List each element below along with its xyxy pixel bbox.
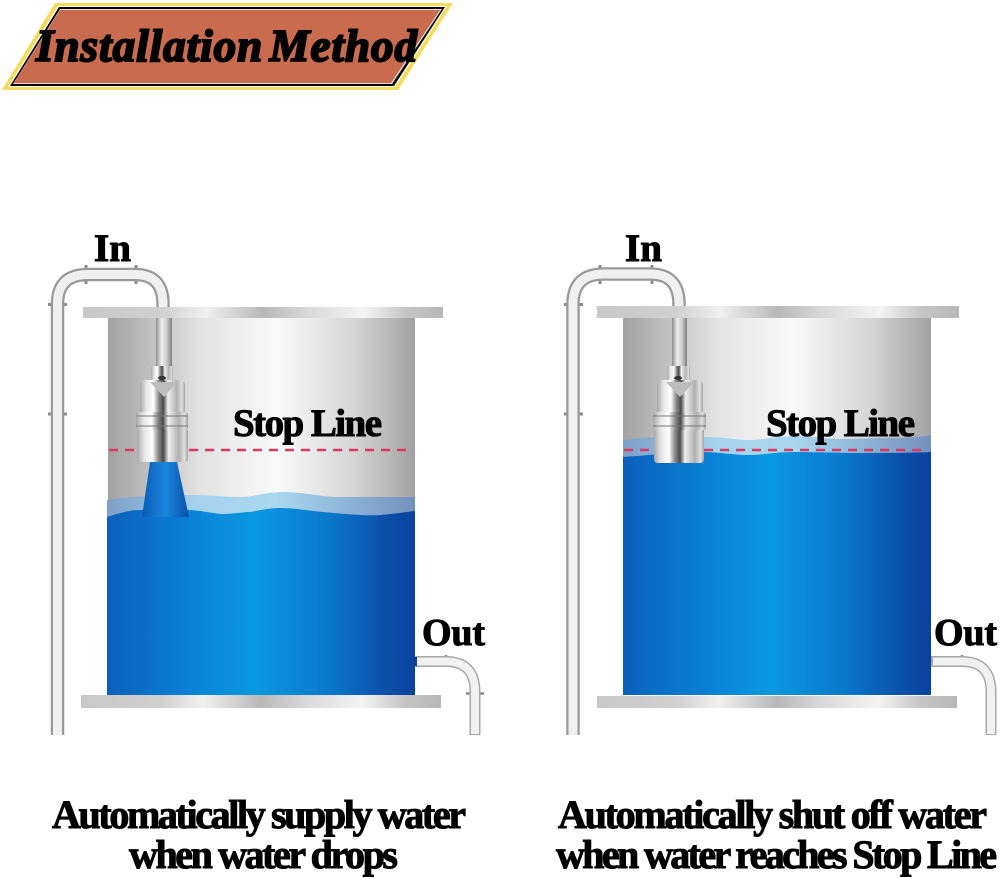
top flange bbox=[83, 307, 443, 318]
bottom flange bbox=[81, 695, 441, 708]
top flange bbox=[597, 306, 959, 318]
caption: left tank: Automatically supply water bbox=[52, 792, 466, 837]
float valve bbox=[653, 318, 706, 463]
title banner bbox=[2, 3, 453, 90]
caption: right tank: Automatically shut off water bbox=[558, 792, 987, 837]
panel: water shut-off tank (right) bbox=[564, 227, 997, 735]
water body bbox=[623, 452, 931, 695]
label: Out: Out bbox=[934, 612, 997, 654]
caption: left tank: when water drops bbox=[129, 832, 398, 877]
tank wall bbox=[623, 318, 931, 458]
inlet pipe bbox=[564, 265, 679, 735]
inlet pipe bbox=[48, 265, 163, 735]
label: In: In bbox=[94, 227, 131, 270]
stop line dashes bbox=[624, 449, 926, 451]
water body bbox=[107, 508, 415, 695]
label: Stop Line: Stop Line bbox=[766, 402, 915, 445]
title text: Installation Method bbox=[35, 21, 418, 71]
water surface band bbox=[107, 492, 415, 520]
caption: right tank bbox=[556, 792, 997, 877]
float valve bbox=[136, 318, 188, 462]
caption: left tank bbox=[52, 792, 466, 877]
label: In: In bbox=[625, 227, 662, 270]
label: Stop Line: Stop Line bbox=[233, 402, 382, 445]
label: Out: Out bbox=[422, 612, 485, 654]
water spray bbox=[142, 462, 189, 517]
caption: right tank: when water reaches Stop Line bbox=[556, 832, 997, 877]
water surface band bbox=[623, 435, 931, 460]
stop line dashes bbox=[109, 449, 411, 451]
tank wall bbox=[108, 318, 415, 518]
panel: water supply tank (left) bbox=[48, 227, 485, 735]
outlet pipe bbox=[414, 655, 484, 735]
outlet pipe bbox=[931, 655, 991, 735]
bottom flange bbox=[597, 696, 957, 708]
